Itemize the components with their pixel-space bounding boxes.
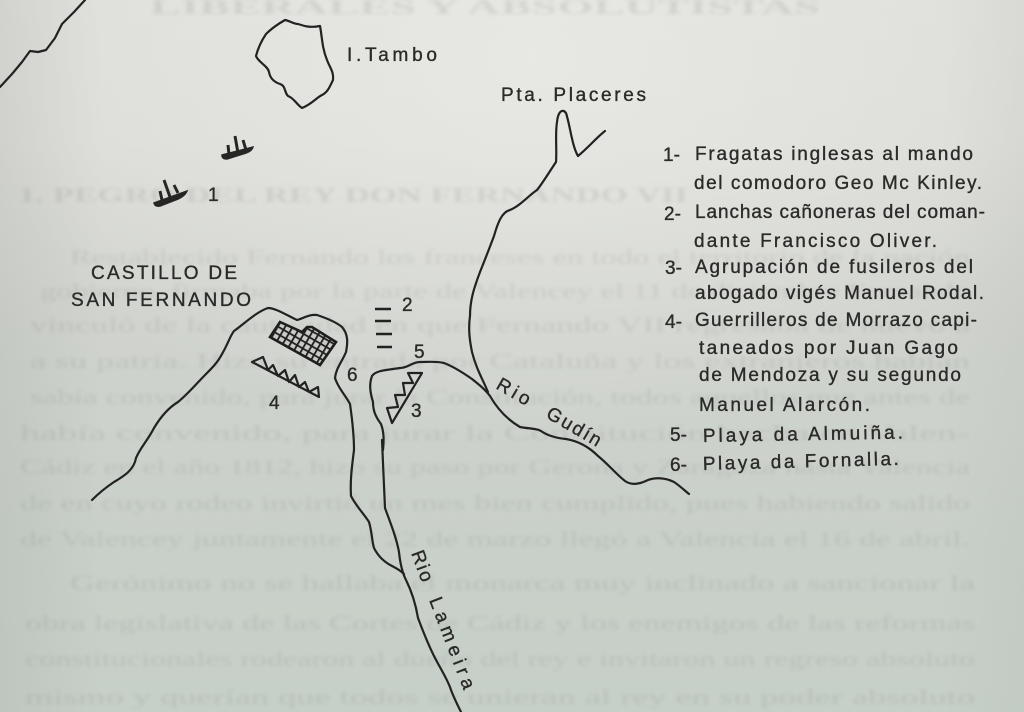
castle: hatched fortress bbox=[270, 322, 336, 365]
unit 3: riflemen bbox=[387, 373, 422, 423]
label: Castillo de San Fernando: SAN FERNANDO bbox=[71, 290, 251, 311]
legend item 4: de Mendoza y su segundo bbox=[699, 365, 961, 386]
show-through text from the reverse page: de en cuyo rodeo invirtió un mes bien cumplido, pues habiendo salido bbox=[20, 491, 970, 515]
show-through text from the reverse page: Gerónimo no se hallaba el monarca muy inclinado a sancionar la bbox=[70, 571, 976, 595]
coast: Castillo headland and beach 6 bbox=[92, 308, 404, 574]
label: Rio Lameira: Rio bbox=[406, 548, 437, 585]
show-through text from the reverse page: gobierno, firmaba por la parte de Valencey el 11 de diciembre Fernando bbox=[40, 279, 970, 303]
label: Rio Gudín: Gudín bbox=[542, 403, 605, 451]
coast: top left bbox=[0, 0, 85, 87]
legend item 1: Fragatas inglesas al mando bbox=[695, 144, 973, 165]
legend item 5: 5- bbox=[670, 425, 687, 446]
legend item 6: 6- bbox=[670, 455, 687, 476]
show-through text from the reverse page: a su patria. Hizo su entrada por Cataluña y los extranjeros habían bbox=[30, 349, 971, 373]
unit 4: guerrillas: 4 bbox=[269, 393, 280, 414]
label: Castillo de San Fernando bbox=[71, 263, 251, 311]
show-through text from the reverse page: mismo y querían que todos se unieran al rey en su poder absoluto bbox=[25, 685, 975, 709]
show-through text from the reverse page: Restablecido Fernando los franceses en todo el territorio de la nación bbox=[70, 245, 971, 269]
legend item 6: Playa da Fornalla. bbox=[703, 449, 899, 475]
label: 6: 6 bbox=[347, 365, 358, 386]
show-through text from the reverse page: Cádiz en el año 1812, hizo su paso por Gerona y Zaragoza hasta Valencia bbox=[20, 455, 971, 479]
unit 4: guerrillas bbox=[252, 357, 319, 414]
label: Pta. Placeres: Pta. Placeres bbox=[501, 85, 646, 106]
legend item 2: dante Francisco Oliver. bbox=[694, 231, 937, 252]
legend item 4: 4- bbox=[665, 312, 682, 333]
legend item 3 bbox=[665, 257, 984, 304]
legend item 3: Agrupación de fusileros del bbox=[695, 257, 973, 278]
island: I. Tambo bbox=[256, 20, 333, 108]
coast: Punta Placeres bbox=[469, 111, 605, 392]
show-through text from the reverse page: 1. PEGRO DEL REY DON FERNANDO VII bbox=[18, 183, 688, 207]
legend item 5: Playa da Almuiña. bbox=[703, 423, 903, 447]
legend item 1 bbox=[663, 144, 982, 194]
label: Rio Lameira: Lameira bbox=[424, 594, 479, 693]
legend item 2: 2- bbox=[664, 204, 681, 225]
unit 2: gunboats: 2 bbox=[402, 295, 413, 316]
legend item 3: 3- bbox=[665, 258, 682, 279]
legend item 4 bbox=[665, 310, 977, 416]
ship: frigate upper bbox=[222, 136, 253, 159]
legend item 1: 1- bbox=[663, 145, 680, 166]
show-through text from the reverse page: vinculó de la cautividad en que Fernando VII regresaba de nuevo a bbox=[30, 313, 971, 337]
label: 5: 5 bbox=[414, 342, 425, 363]
legend item 3: abogado vigés Manuel Rodal. bbox=[695, 283, 984, 304]
unit 3: riflemen: 3 bbox=[411, 401, 422, 422]
legend item 2 bbox=[664, 202, 985, 252]
show-through text from the reverse page: obra legislativa de las Cortes de Cádiz y los enemigos de las reformas bbox=[25, 611, 975, 635]
label: Rio Gudín bbox=[492, 374, 605, 451]
unit 2: gunboats bbox=[375, 295, 413, 347]
legend item 4: Manuel Alarcón. bbox=[699, 395, 870, 416]
river: Rio Lameira bbox=[382, 440, 461, 712]
ship: frigate lower with number 1: 1 bbox=[208, 185, 219, 206]
show-through text from the reverse page: sabía convenido, para jurar la Constitución, todos aquellos que antes de bbox=[30, 385, 970, 409]
river: Rio Gudín and beach 5 bbox=[370, 362, 689, 494]
legend item 2: Lanchas cañoneras del coman- bbox=[695, 202, 985, 223]
legend item 4: taneados por Juan Gago bbox=[699, 338, 958, 359]
show-through text from the reverse page: constitucionales rodearon al dueño del rey e invitaron un regreso absoluto bbox=[25, 647, 975, 671]
label: Rio Lameira bbox=[406, 548, 479, 693]
legend item 1: del comodoro Geo Mc Kinley. bbox=[694, 173, 982, 194]
label: Rio Gudín: Rio bbox=[492, 374, 534, 410]
legend bbox=[663, 144, 985, 476]
legend item 4: Guerrilleros de Morrazo capi- bbox=[695, 310, 977, 331]
show-through text from the reverse page: había convenido, para jurar la Constitución hecha en Valen- bbox=[20, 421, 970, 445]
show-through text from the reverse page: de Valencey juntamente el 22 de marzo llegó a Valencia el 16 de abril. bbox=[20, 527, 970, 551]
ship: frigate lower with number 1 bbox=[154, 180, 219, 206]
label: I. Tambo: I.Tambo bbox=[347, 45, 437, 66]
label: Castillo de San Fernando: CASTILLO DE bbox=[91, 263, 237, 284]
